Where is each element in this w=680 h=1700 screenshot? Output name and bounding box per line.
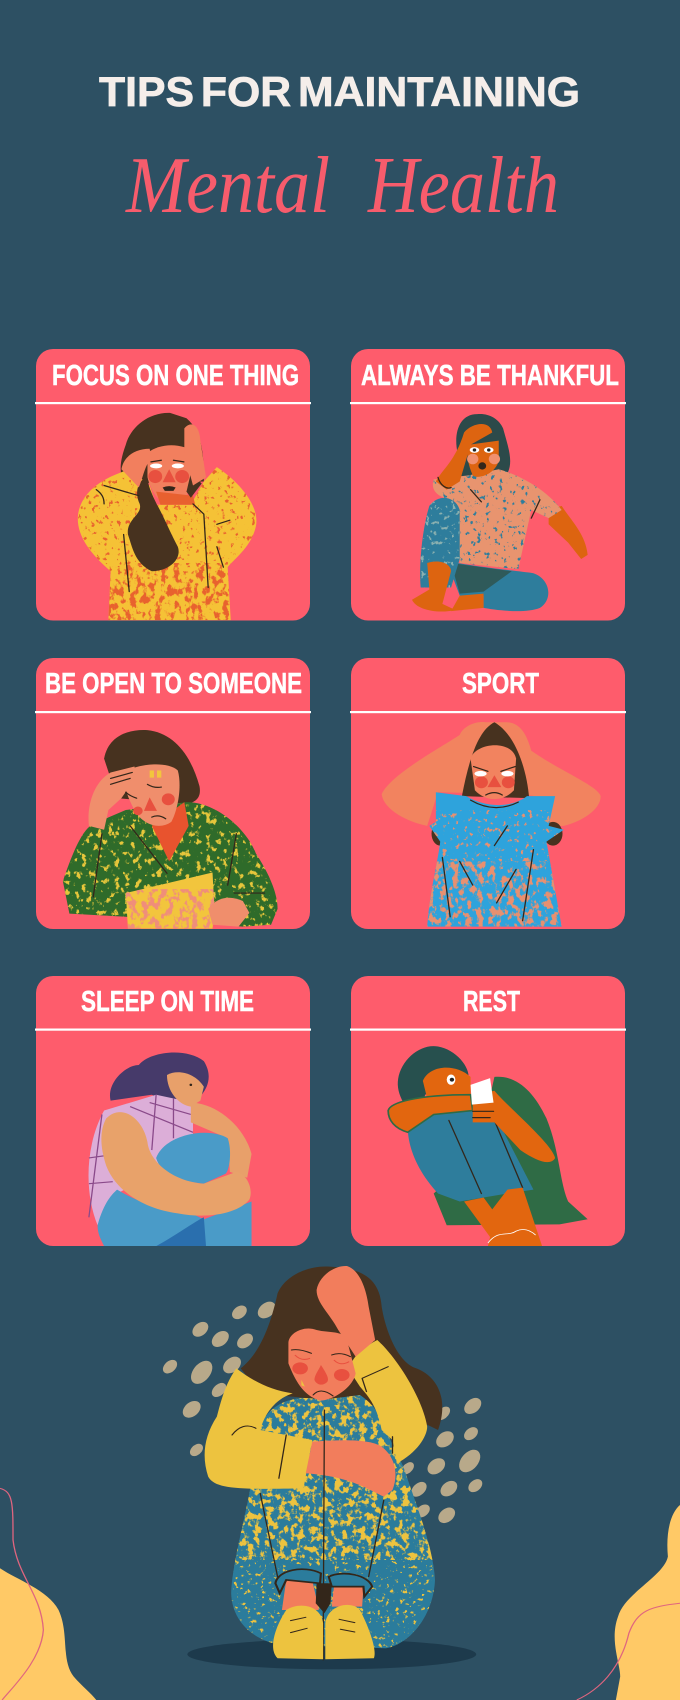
panel: rest (350, 976, 626, 1246)
right shoe (325, 1605, 375, 1659)
left shoe (273, 1606, 323, 1659)
face (288, 1328, 356, 1401)
panel: focus on one thing (35, 349, 311, 620)
hair (241, 1266, 442, 1430)
clothing lines (232, 1367, 392, 1660)
title: mental health script: Mental (125, 142, 330, 230)
jeans texture upper (230, 1393, 438, 1560)
shoe laces (291, 1617, 355, 1633)
panel: always be thankful (350, 349, 626, 620)
center dark wedge (316, 1583, 332, 1613)
illustration: seated woman with hand on forehead (412, 414, 588, 612)
ground shadow (187, 1639, 476, 1669)
jeans texture lower (230, 1557, 438, 1650)
left sleeve (205, 1368, 312, 1489)
title: mental health script: Health (367, 142, 559, 230)
raised arm (317, 1266, 375, 1357)
heading: focus on one thing: FOCUS ON ONE THING (52, 360, 299, 392)
panel: sport (350, 658, 626, 929)
panel: sleep on time (35, 976, 311, 1246)
hugging hand (306, 1440, 395, 1497)
decoration: left yellow blob (0, 1568, 96, 1700)
illustration: woman hugging knees in plaid top (89, 1052, 252, 1246)
heading: sport: SPORT (462, 668, 539, 700)
panel: be open to someone (35, 658, 311, 929)
heading: rest: REST (463, 986, 520, 1018)
heading: be open to someone: BE OPEN TO SOMEONE (45, 668, 302, 700)
decoration: right yellow blob (615, 1505, 680, 1700)
heading: sleep on time: SLEEP ON TIME (81, 986, 254, 1018)
title: tips for maintaining: TIPS FOR MAINTAINING (99, 68, 580, 115)
illustration: frustrated woman in blue shirt (382, 722, 601, 927)
right sleeve (349, 1340, 427, 1463)
illustration: curled up woman looking at phone (388, 1046, 588, 1246)
jeans (231, 1395, 435, 1648)
background dots (160, 1299, 485, 1525)
illustration: main sad woman hugging knees (160, 1266, 485, 1669)
title: mental health script (125, 142, 559, 230)
illustration: woman holding head in yellow sweater (78, 413, 260, 620)
face details (291, 1350, 350, 1396)
ankles (282, 1580, 363, 1610)
illustration: woman reading a letter in green shirt (61, 730, 280, 929)
decoration: pink curved lines (0, 1488, 680, 1700)
pant cuffs (275, 1569, 372, 1597)
